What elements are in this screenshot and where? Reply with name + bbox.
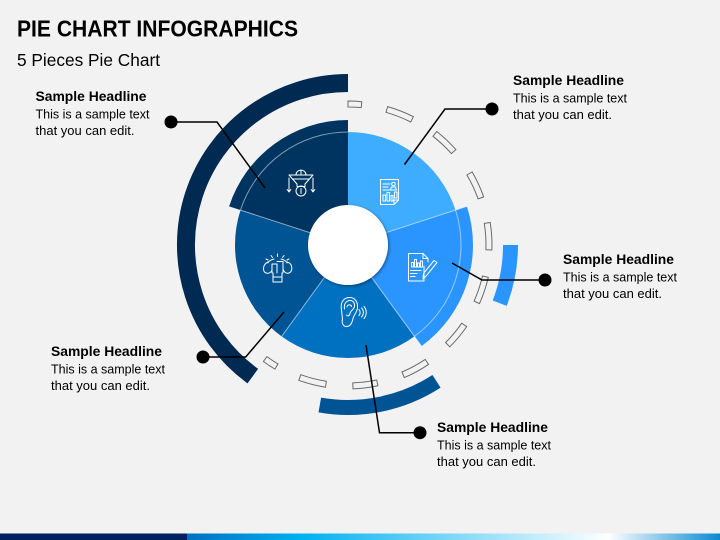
text block: top right: [513, 72, 627, 122]
icon: ear with sound waves: [341, 298, 366, 326]
subtitle: 5 Pieces Pie Chart: [17, 50, 160, 70]
text block: bottom left: that you can edit.: [51, 378, 150, 393]
pie slice: left deep blue: [235, 210, 348, 336]
icon: bulb with leaves: [264, 254, 292, 282]
connector: bottom left: [196, 312, 284, 364]
connector: top left: [164, 116, 265, 188]
centre white circle: [308, 205, 388, 285]
text block: top left: Sample Headline: [36, 88, 147, 104]
pie slice: light blue: [348, 132, 456, 245]
outer arc: navy: [186, 83, 348, 376]
text block: bottom: This is a sample text: [437, 437, 551, 452]
pie slice: navy raised: [229, 120, 348, 245]
text block: right: [563, 251, 677, 301]
text block: bottom left: [51, 343, 165, 393]
icon: funnel with coins: [287, 170, 315, 196]
text block: top left: This is a sample text: [36, 106, 150, 121]
connector: bottom: [366, 345, 426, 439]
text block: bottom: [437, 419, 551, 469]
text block: top right: This is a sample text: [513, 90, 627, 105]
icon: document with chart and pencil: [408, 254, 437, 281]
text block: right: Sample Headline: [563, 251, 674, 267]
text block: top left: that you can edit.: [36, 123, 134, 138]
footer bar: [0, 534, 720, 540]
pie slice: bright blue raised: [348, 206, 473, 346]
dashed ring of outlined segments: [263, 101, 492, 389]
connector: right: [452, 263, 552, 286]
text block: right: This is a sample text: [563, 269, 677, 284]
text block: bottom left: This is a sample text: [51, 361, 165, 376]
text block: bottom: Sample Headline: [437, 419, 548, 435]
outer arc: bottom blue: [320, 381, 436, 407]
text block: top right: Sample Headline: [513, 72, 624, 88]
text block: bottom left: Sample Headline: [51, 343, 162, 359]
thin slice separators: [240, 132, 467, 346]
pie chart: [229, 120, 473, 358]
text block: right: that you can edit.: [563, 286, 662, 301]
title: PIE CHART INFOGRAPHICS: [17, 16, 298, 42]
pie slice: bottom mid blue: [282, 245, 414, 358]
outer arc: right bright blue: [500, 245, 510, 303]
icon: report document: [380, 180, 398, 204]
text block: bottom: that you can edit.: [437, 454, 536, 469]
text block: top right: that you can edit.: [513, 107, 612, 122]
text block: top left: [36, 88, 150, 138]
connector: top right: [404, 102, 498, 164]
